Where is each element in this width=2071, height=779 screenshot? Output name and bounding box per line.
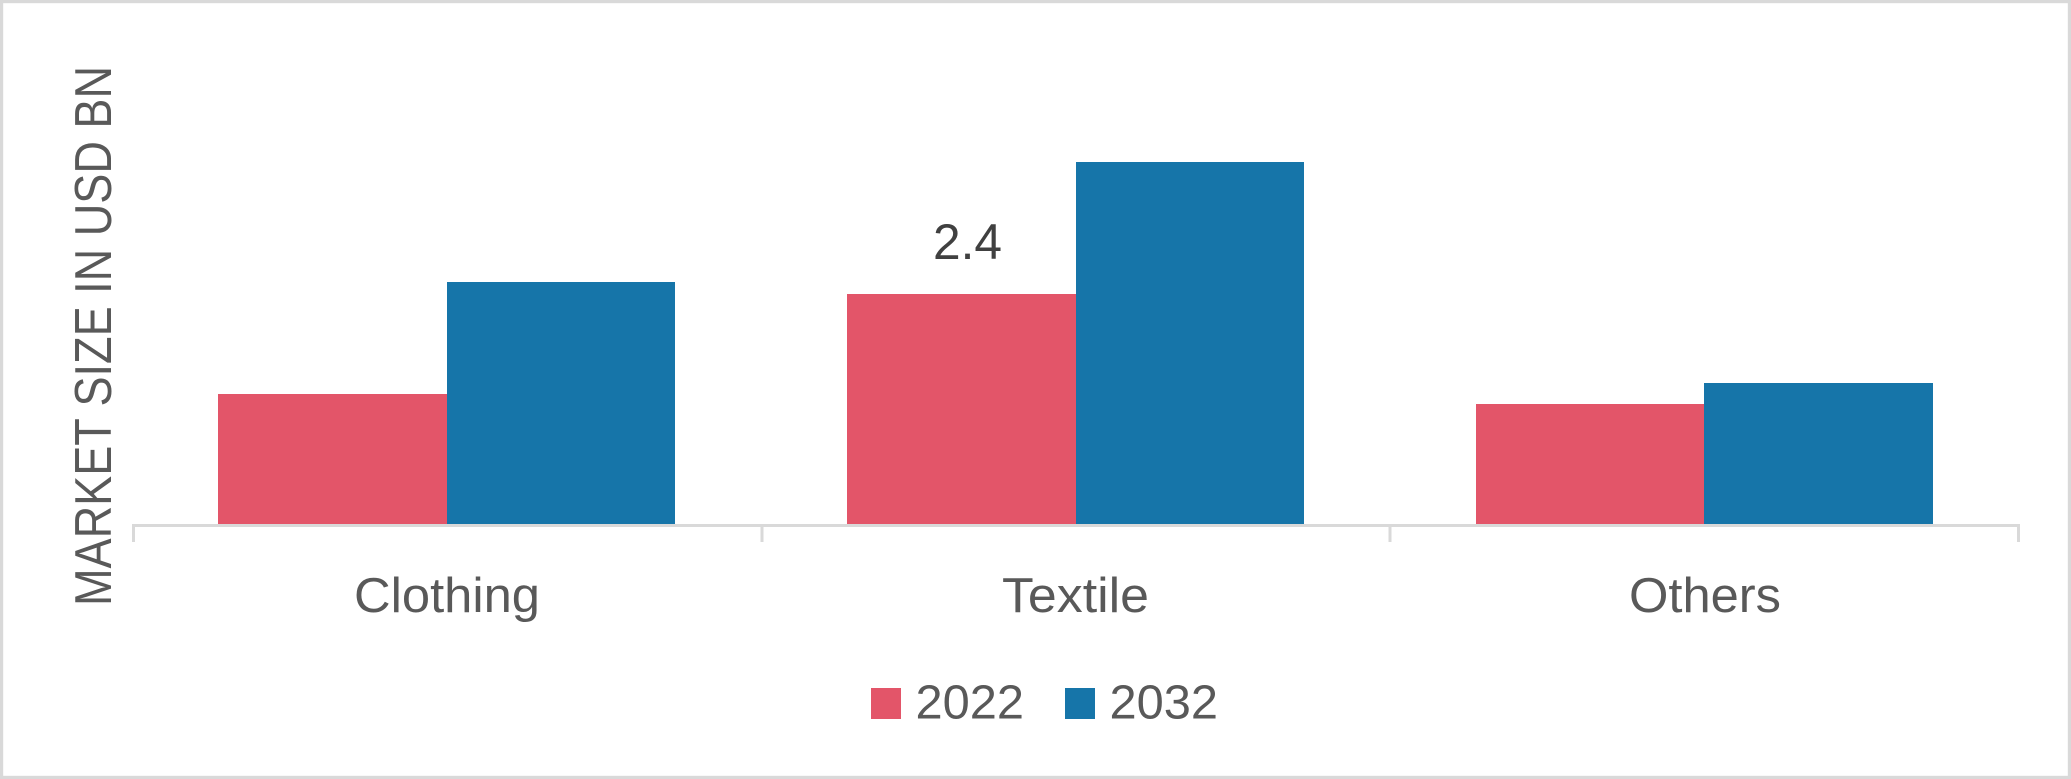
x-axis line and ticks <box>134 526 2018 542</box>
bar chart <box>134 162 2018 623</box>
legend item: 2022: 2022 <box>916 676 1024 730</box>
category label: Others: Others <box>1629 569 1781 623</box>
legend item: 2032: 2032 <box>1110 676 1218 730</box>
category label: Clothing: Clothing <box>354 569 540 623</box>
bars: Others <box>1476 383 1933 524</box>
legend item: 2032 <box>1065 676 1218 730</box>
legend item: 2022 <box>871 676 1024 730</box>
bars: Clothing <box>218 282 675 524</box>
legend <box>871 676 1218 730</box>
bars: Textile <box>847 162 1304 524</box>
data label: 2.4: 2.4 <box>933 214 1002 270</box>
y-axis title: MARKET SIZE IN USD BN <box>65 66 123 606</box>
category label: Textile: Textile <box>1002 569 1149 623</box>
